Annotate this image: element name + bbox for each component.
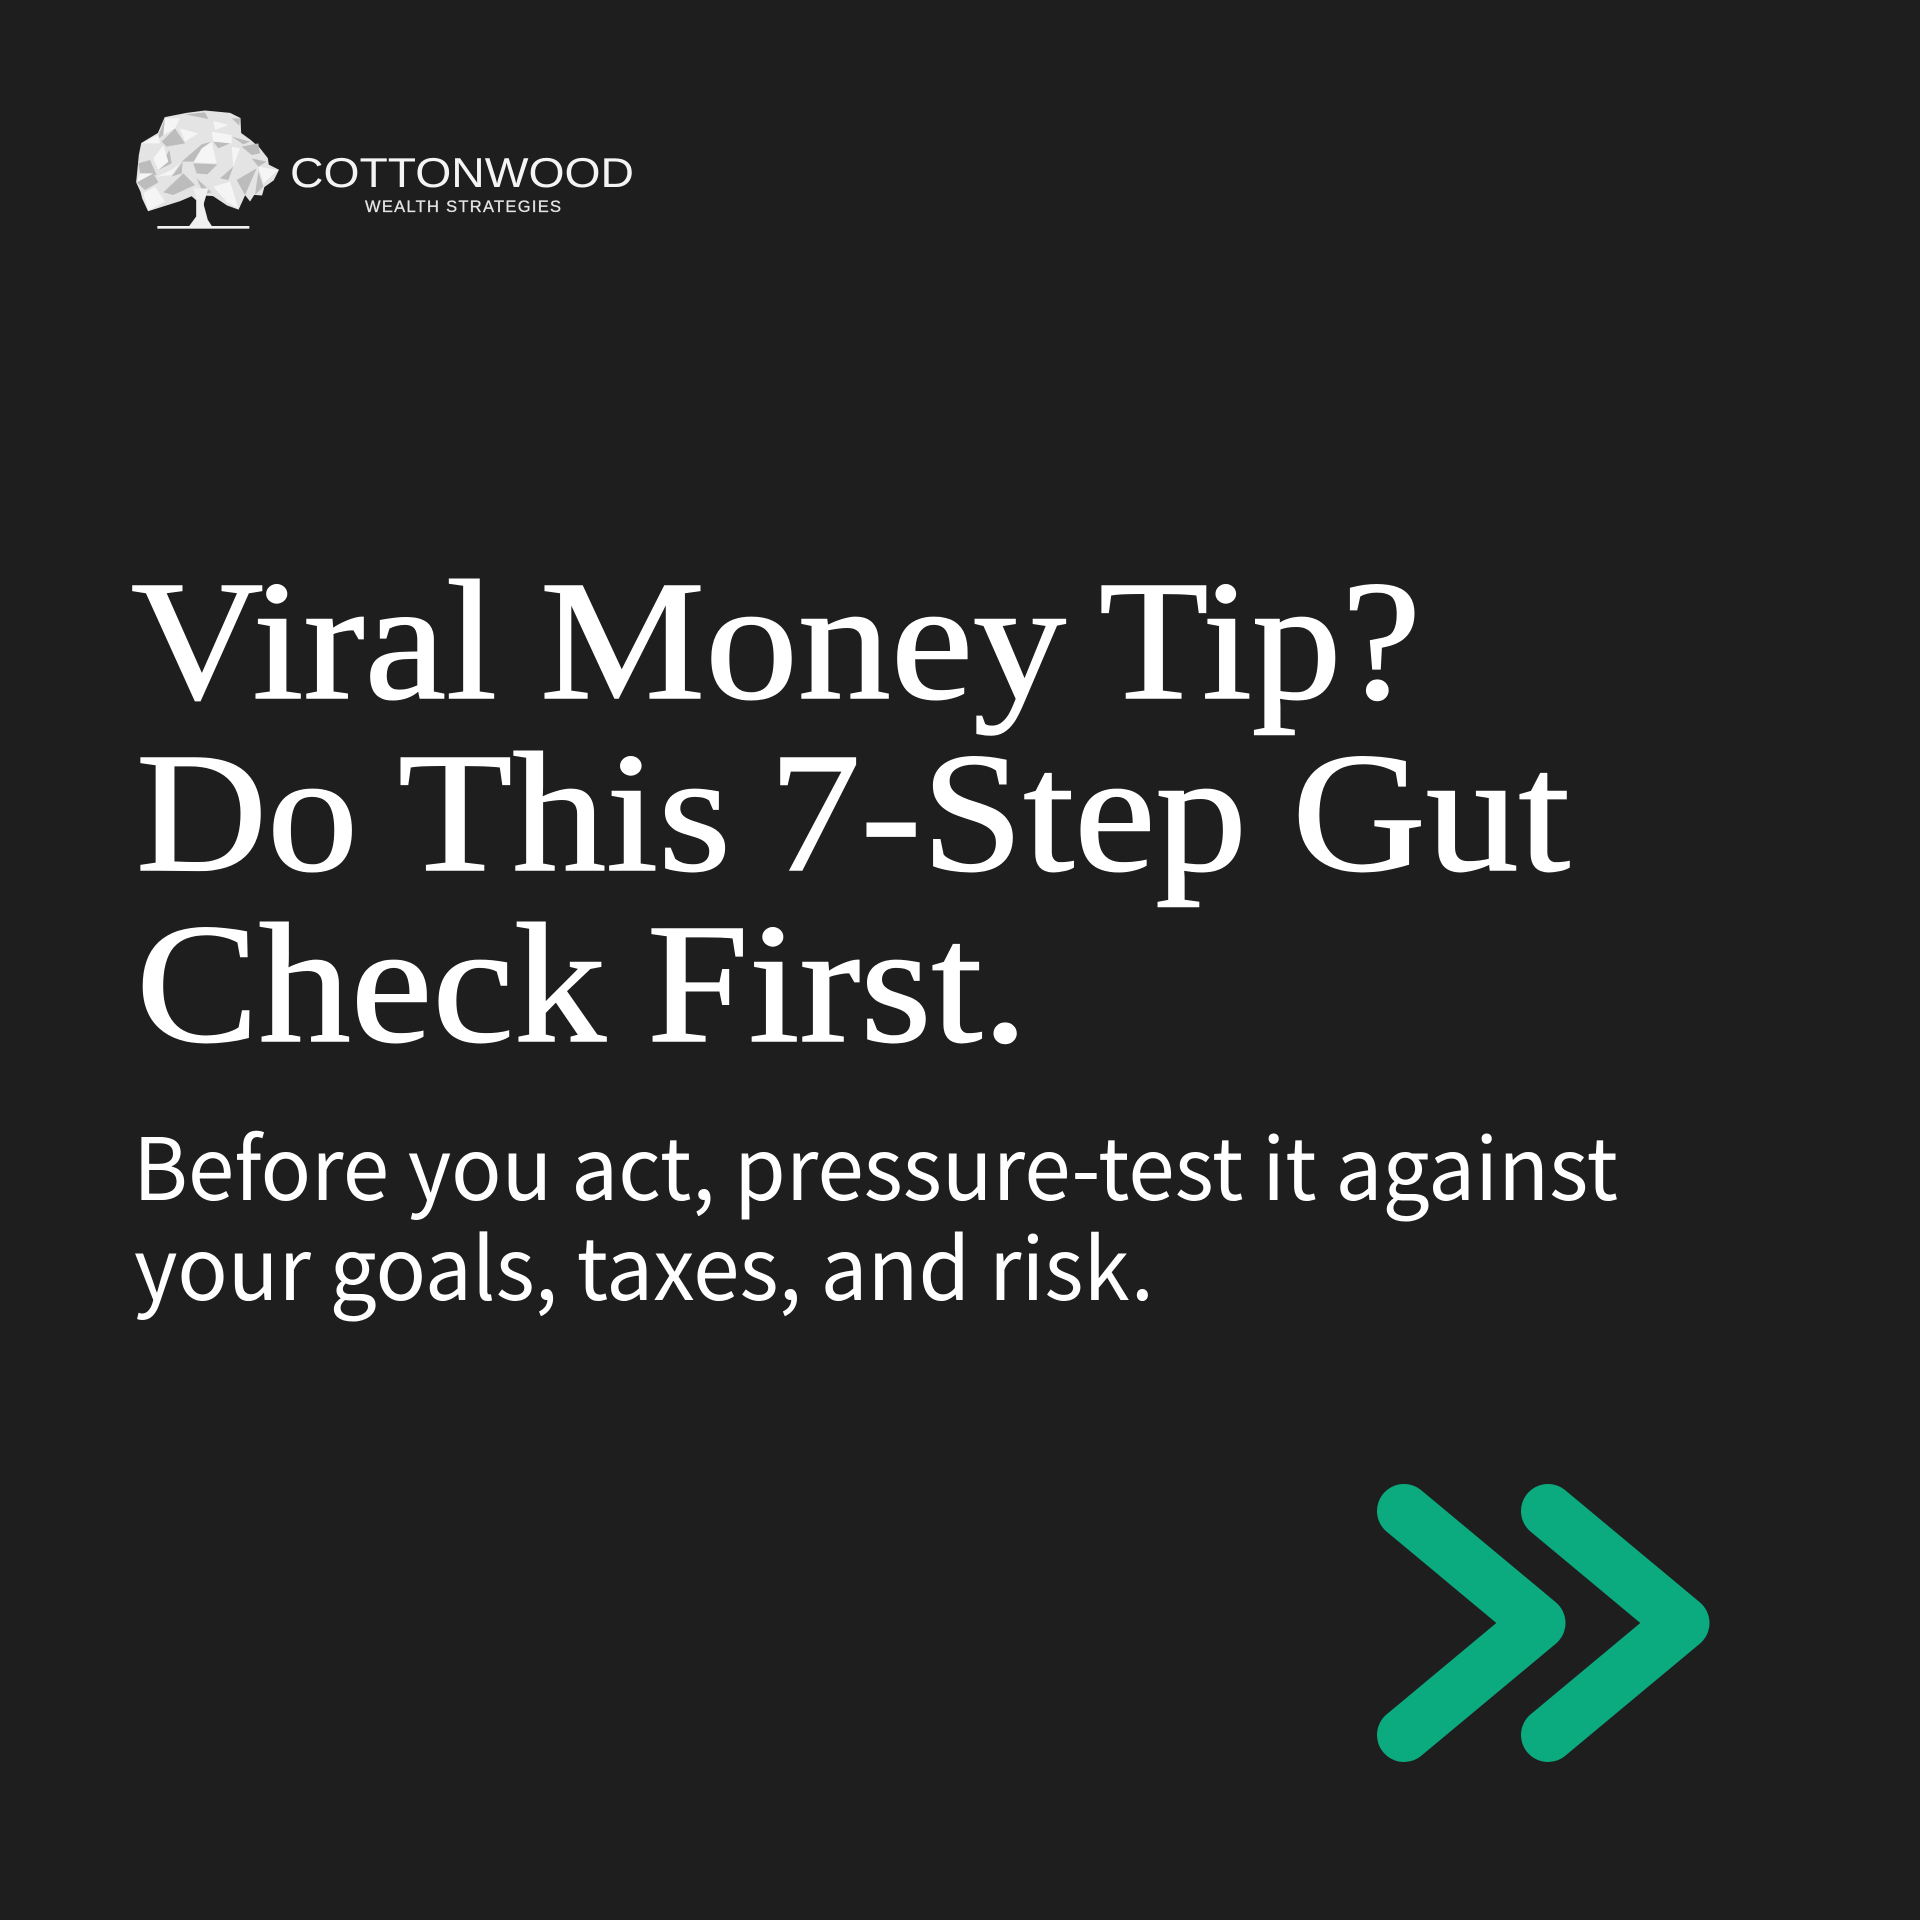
subtitle: Before you act, pressure-test it against [133,1100,1618,1225]
title [131,546,1570,1078]
icon: tree trunk [189,188,212,227]
logo wordmark: COTTONWOOD [290,149,634,196]
icon: double chevron arrow [1404,1511,1682,1735]
title: 7-Step [769,718,1247,907]
title: This [398,718,731,907]
title: Tip? [1099,546,1421,735]
subtitle [133,1100,1618,1325]
title: First. [647,889,1028,1078]
title: Viral [131,546,497,735]
icon: ground line [157,226,249,229]
title: Do [136,718,358,907]
title: Check [136,889,607,1078]
icon: low-poly tree [137,111,278,229]
logo: Cottonwood Wealth Strategies [137,111,634,229]
title: Money [540,546,1066,736]
logo tagline: WEALTH STRATEGIES [365,198,561,216]
subtitle: your goals, taxes, and risk. [134,1200,1154,1325]
title: Gut [1292,718,1570,907]
